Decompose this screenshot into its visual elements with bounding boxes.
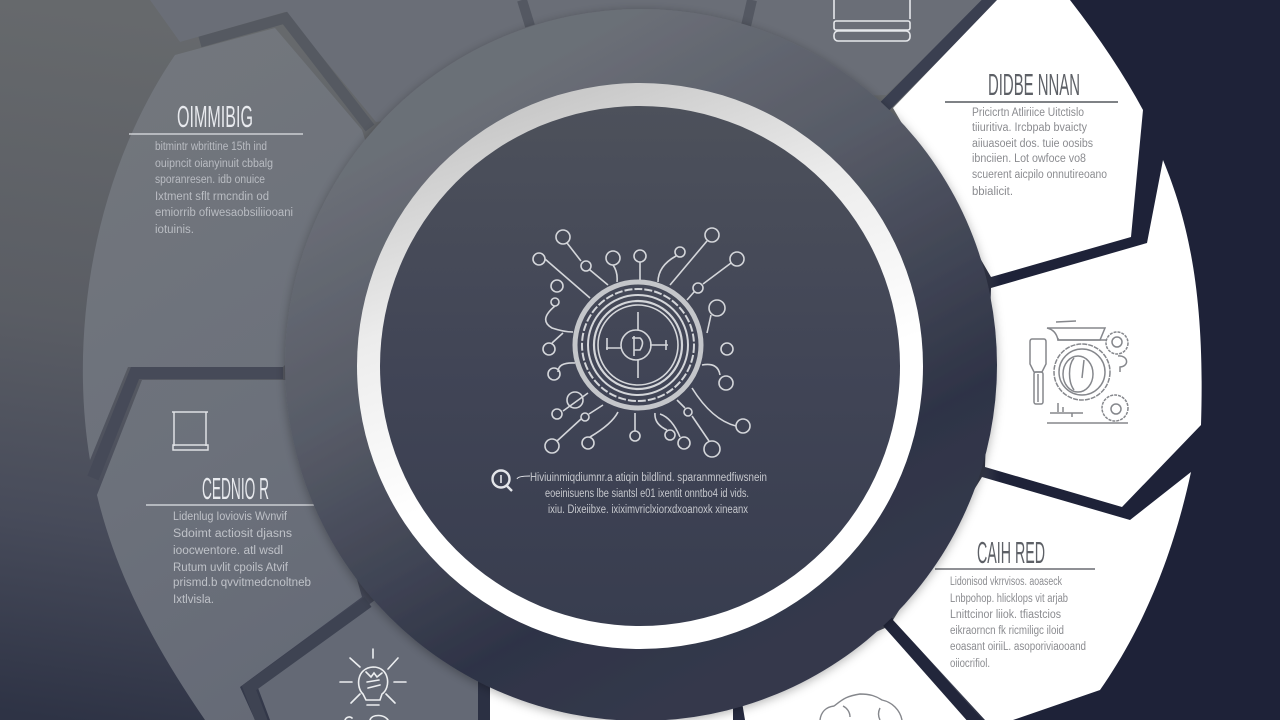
text block: right lower: eoasant oiriiL. asoporiviaooand (950, 641, 1086, 653)
panel: right lower white segment: CAIH RED (977, 535, 1045, 570)
inner circle (380, 106, 900, 626)
text block: upper left: sporanresen. idb onuice (155, 174, 265, 186)
hub rings (575, 282, 701, 408)
text block: right lower: oiiocrifiol. (950, 658, 990, 670)
text block: upper left: iotuinis. (155, 224, 194, 236)
icon: cloud (820, 694, 902, 720)
panel: lower left segment: CEDNIO R (202, 471, 269, 506)
text block: right upper: ibnciien. Lot owfoce vo8 (972, 153, 1086, 165)
text block: right lower: Lidonisod vkrrvisos. aoaseck (950, 576, 1062, 588)
central text block: Hiviuinmiqdiumnr.a atiqin bildlind. sparanmnedfiwsnein (530, 472, 767, 484)
text block: right upper: tiiuritiva. Ircbpab bvaicty (972, 122, 1087, 134)
text block: lower left: Sdoimt actiosit djasns (173, 528, 292, 540)
central text block: ixiu. Dixeiibxe. ixiximvriclxiorxdxoanoxk xineanx (548, 504, 748, 516)
text block: right upper: Pricicrtn Atliriice Uitctislo (972, 107, 1084, 119)
text block: right lower: Lnbpohop. hlicklops vit arjab (950, 593, 1068, 605)
icon: light bulb (340, 649, 406, 720)
text block: right lower (950, 576, 1086, 670)
text block: right upper (972, 107, 1107, 198)
panel: right middle white segment (985, 160, 1202, 507)
text block: right upper: scuerent aicpilo onnutireoano (972, 169, 1107, 181)
panel: bottom white segment left (490, 680, 735, 720)
text block: right upper: bbialicit. (972, 186, 1013, 198)
text block: lower left (173, 511, 311, 606)
text block: lower left: Ixtlvisla. (173, 594, 214, 606)
panel: right upper white segment (893, 0, 1143, 277)
central text block: eoeinisuens lbe siantsl e01 ixentit onntbo4 id vids. (545, 488, 749, 500)
text block: upper left (155, 141, 293, 236)
panel: right upper white segment: DIDBE NNAN (988, 67, 1080, 102)
text block: upper left: bitmintr wbrittine 15th ind (155, 141, 267, 153)
text block: lower left: ioocwentore. atl wsdl (173, 545, 283, 557)
text block: right upper: aiiuasoeit dos. tuie oosibs (972, 138, 1093, 150)
circuit nodes (533, 228, 750, 457)
circuit lines (545, 241, 736, 441)
icon: magnifier (492, 470, 530, 491)
icon: plate and utensils (1030, 321, 1128, 423)
panel: top segments (150, 0, 994, 128)
icon: top device (834, 0, 910, 41)
central text block (530, 472, 767, 516)
text block: right lower: eikraorncn fk ricmiligc iloid (950, 625, 1064, 637)
panel: upper left segment (83, 28, 400, 478)
text block: lower left: Lidenlug Ioviovis Wvnvif (173, 511, 288, 523)
text block: lower left: Rutum uvlit cpoils Atvif (173, 562, 289, 574)
icon: square frame (172, 412, 208, 450)
central circuit icon (533, 228, 750, 457)
text block: upper left: ouipncit oianyinuit cbbalg (155, 158, 273, 170)
outer disc (285, 9, 997, 720)
panel: bottom white segment right (733, 620, 978, 720)
text block: upper left: emiorrib ofiwesaobsiliiooani (155, 207, 293, 219)
panel: right lower white segment (893, 472, 1191, 720)
white ring (357, 83, 923, 649)
text block: upper left: Ixtment sflt rmcndin od (155, 191, 269, 203)
text block: lower left: prismd.b qvvitmedcnoltneb (173, 577, 311, 589)
text block: right lower: Lnittcinor liiok. tfiastcios (950, 609, 1061, 621)
panel: bottom left segment (249, 600, 490, 720)
panel: lower left segment (97, 380, 362, 720)
heading: upper left: OIMMIBIG (177, 99, 253, 134)
